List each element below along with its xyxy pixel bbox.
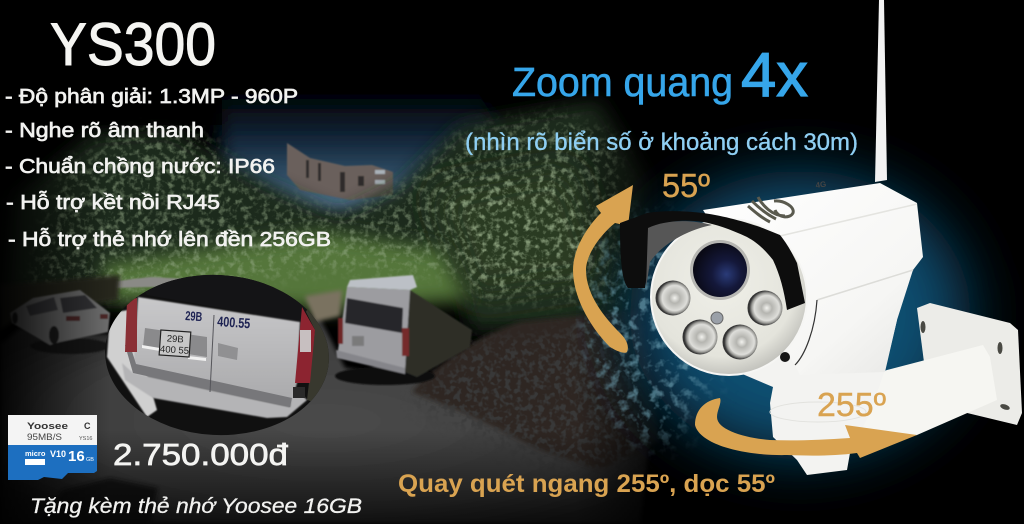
headline: optical zoom — [512, 41, 808, 110]
sun visor — [620, 211, 805, 310]
feature: audio: - Nghe rõ âm thanh — [5, 119, 204, 142]
photo: trees and bushes — [0, 100, 650, 330]
card V10: V10 — [50, 449, 66, 459]
card white label — [8, 415, 97, 445]
seam line — [795, 300, 817, 365]
card microSD logo: micro — [25, 449, 46, 458]
photo: leaf speckles on mound — [424, 328, 631, 464]
door text 29B: 29B — [185, 308, 203, 324]
visor underside — [646, 221, 712, 288]
magnified licence plate lens — [105, 274, 329, 436]
photo: parked silver car — [10, 290, 110, 354]
rear plate — [159, 330, 191, 357]
pan base and stem — [740, 320, 897, 475]
housing logo — [748, 197, 793, 222]
door text 400.55: 400.55 — [217, 313, 251, 331]
card brand: Yoosee — [27, 421, 68, 431]
subheading: plate distance: (nhìn rõ biển số ở khoảng cách 30m) — [465, 129, 858, 156]
housing top edge shade — [780, 204, 917, 236]
zoom lens — [690, 240, 750, 300]
feature: memory card: - Hỗ trợ thẻ nhớ lên đền 256GB — [8, 228, 331, 251]
base ring — [770, 402, 866, 422]
housing small icons: 4G — [815, 180, 827, 190]
caption: pan and tilt: Quay quét ngang 255º, dọc 55º — [398, 470, 775, 498]
card body — [8, 415, 97, 480]
camera housing — [703, 183, 923, 375]
glow mottling — [570, 206, 722, 456]
feature: waterproof: - Chuẩn chồng nước: IP66 — [5, 155, 275, 178]
label: 55 degrees: 55º — [662, 167, 710, 204]
rear plate: 29B — [166, 333, 184, 346]
housing lower seam — [817, 270, 913, 300]
feature: resolution: - Độ phân giải: 1.3MP - 960P — [5, 85, 298, 108]
photo: distant building — [287, 143, 393, 200]
bracket plate mount holes — [920, 321, 1011, 411]
card GB: GB — [86, 457, 94, 463]
memory card — [8, 415, 97, 480]
photo: leaf texture — [32, 108, 626, 310]
rear plate: 400 55 — [160, 344, 189, 357]
reset screw — [780, 352, 790, 362]
card capacity: 16 — [68, 448, 85, 465]
magnified van rear — [107, 270, 340, 418]
glow blur — [605, 150, 995, 480]
photo: rubble behind the lens — [108, 277, 190, 288]
background: surveillance street photo — [6, 94, 655, 524]
camera front face — [651, 219, 807, 375]
price: 2.750.000đ — [113, 437, 289, 472]
55 degree curved arrow — [573, 185, 633, 353]
feature: RJ45: - Hỗ trợ kềt nồi RJ45 — [6, 191, 220, 214]
label: 255 degrees: 255º — [817, 386, 886, 423]
headline text: Zoom quang — [512, 59, 733, 105]
infrared LEDs — [656, 280, 782, 360]
blue glow behind camera — [570, 150, 995, 480]
camera — [620, 0, 1022, 475]
light sensor — [711, 312, 723, 324]
lens backdrop — [101, 269, 333, 441]
photo: ground by the hedge — [0, 275, 120, 330]
photo: road — [0, 318, 650, 524]
photo: foreground shadows — [40, 478, 158, 524]
card class: C — [84, 421, 91, 431]
gift note: Tặng kèm thẻ nhớ Yoosee 16GB — [30, 494, 362, 518]
card speed: 95MB/S — [27, 432, 62, 443]
card HC mark — [25, 459, 45, 465]
bracket wall plate — [917, 303, 1022, 425]
photo: fallen leaves mound — [412, 310, 660, 470]
photo: sky — [222, 50, 500, 215]
255 degree curved arrow — [695, 398, 917, 458]
card model: YS16 — [79, 436, 92, 442]
bracket arm — [860, 345, 997, 445]
antenna — [875, 0, 887, 182]
photo: tan ground by the van — [305, 290, 342, 322]
title: YS300: YS300 — [50, 11, 216, 78]
photo: distant white van — [335, 275, 472, 385]
feature list — [5, 85, 331, 251]
headline 4x: 4x — [741, 41, 808, 110]
